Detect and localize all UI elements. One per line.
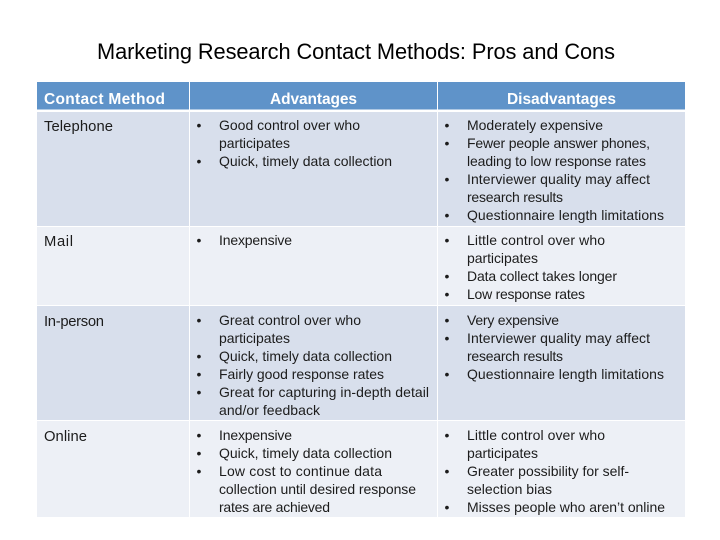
row: mail: Inexpensive	[219, 232, 292, 248]
row: in-person: research results	[467, 348, 563, 364]
row: in-person: •	[444, 366, 450, 382]
row: in-person: participates	[219, 330, 290, 346]
row: online: •	[196, 445, 202, 461]
row: mail: •	[444, 268, 450, 284]
row: in-person: Interviewer quality may affect	[467, 330, 650, 346]
row: in-person: Great for capturing in-depth detail	[219, 384, 429, 400]
row: mail: Low response rates	[467, 286, 585, 302]
row: telephone: Questionnaire length limitations	[467, 207, 664, 223]
header row: Advantages	[270, 91, 357, 108]
row: telephone	[37, 112, 685, 226]
row: in-person: In-person	[44, 314, 104, 330]
row: telephone: Good control over who	[219, 117, 360, 133]
row: in-person: Great control over who	[219, 312, 361, 328]
row: telephone: Fewer people answer phones,	[467, 135, 650, 151]
row: in-person: •	[444, 330, 450, 346]
row: online: Inexpensive	[219, 427, 292, 443]
row: mail: Little control over who	[467, 232, 605, 248]
row: telephone: Telephone	[44, 119, 113, 135]
row: in-person: Quick, timely data collection	[219, 348, 392, 364]
row: in-person: •	[196, 366, 202, 382]
row: telephone: •	[444, 135, 450, 151]
row: in-person: Fairly good response rates	[219, 366, 384, 382]
row: online: Quick, timely data collection	[219, 445, 392, 461]
row: in-person: •	[196, 348, 202, 364]
title: Marketing Research Contact Methods: Pros and Cons	[97, 39, 615, 64]
row: mail: •	[444, 286, 450, 302]
row: telephone: leading to low response rates	[467, 153, 646, 169]
row: online: Misses people who aren’t online	[467, 499, 665, 515]
row: mail: •	[196, 232, 202, 248]
row: in-person: •	[196, 384, 202, 400]
row: in-person: •	[196, 312, 202, 328]
row: telephone: •	[196, 117, 202, 133]
row: in-person: •	[444, 312, 450, 328]
row: telephone: •	[196, 153, 202, 169]
row: online: •	[196, 427, 202, 443]
row: telephone: research results	[467, 189, 563, 205]
row: telephone: Interviewer quality may affect	[467, 171, 650, 187]
row: telephone: Moderately expensive	[467, 117, 603, 133]
row: online: Greater possibility for self-	[467, 463, 629, 479]
row: telephone: Quick, timely data collection	[219, 153, 392, 169]
row: in-person: and/or feedback	[219, 402, 321, 418]
row: online: Online	[44, 429, 87, 445]
row: mail: Data collect takes longer	[467, 268, 617, 284]
row: online: •	[444, 499, 450, 515]
row: telephone: •	[444, 117, 450, 133]
row: online: •	[444, 463, 450, 479]
header row: Disadvantages	[507, 91, 616, 108]
row: in-person: Questionnaire length limitations	[467, 366, 664, 382]
row: online: •	[444, 427, 450, 443]
row: mail: •	[444, 232, 450, 248]
header row	[37, 82, 685, 110]
table: contact methods	[37, 82, 685, 517]
row: mail	[37, 227, 685, 305]
row: online: selection bias	[467, 481, 552, 497]
row: online: •	[196, 463, 202, 479]
row: online: Low cost to continue data	[219, 463, 382, 479]
row: online: participates	[467, 445, 538, 461]
row: telephone: •	[444, 207, 450, 223]
row: telephone: •	[444, 171, 450, 187]
row: telephone: participates	[219, 135, 290, 151]
header row: Contact Method	[44, 91, 165, 108]
row: in-person	[37, 306, 685, 420]
row: online: Little control over who	[467, 427, 605, 443]
row: online: collection until desired response	[219, 481, 416, 497]
row: mail: Mail	[44, 234, 73, 250]
row: mail: participates	[467, 250, 538, 266]
row: online	[37, 421, 685, 517]
row: in-person: Very expensive	[467, 312, 559, 328]
row: online: rates are achieved	[219, 499, 330, 515]
